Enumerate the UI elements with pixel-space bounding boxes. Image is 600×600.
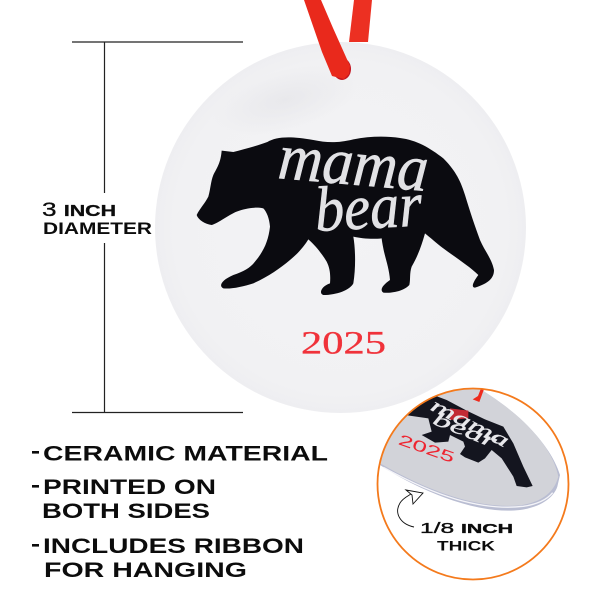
lettering: bear: bear <box>313 168 425 245</box>
bear silhouette with lettering <box>197 120 494 295</box>
inset lettering: mama: mama <box>427 394 513 452</box>
inset border <box>378 388 568 580</box>
inset ornament edge <box>380 391 560 511</box>
icon: curved arrow <box>398 490 423 527</box>
label: diameter: DIAMETER <box>43 220 152 238</box>
label: thick: THICK <box>437 538 495 554</box>
inset lettering: bear: bear <box>430 408 500 453</box>
feature: ceramic material: CERAMIC MATERIAL <box>43 442 328 466</box>
feature list <box>32 442 328 582</box>
year: 2025 <box>301 326 386 362</box>
feature: printed on both sides: BOTH SIDES <box>42 500 210 523</box>
ribbon: hole and front strand <box>304 0 351 80</box>
inset year: 2025 <box>396 432 457 467</box>
feature: printed on both sides <box>32 476 216 523</box>
feature: includes ribbon for hanging <box>32 535 304 582</box>
inset bear <box>405 395 533 487</box>
label: 3 inch: 3 INCH <box>42 200 116 221</box>
ornament disc <box>155 42 526 413</box>
lettering: mama: mama <box>276 120 431 206</box>
inset: edge thickness close-up <box>370 380 568 580</box>
feature: includes ribbon for hanging: FOR HANGING <box>44 559 247 582</box>
dimension bracket: 3 inch diameter <box>72 42 243 412</box>
inset ribbon <box>473 388 484 402</box>
feature: printed on both sides: PRINTED ON <box>43 476 216 499</box>
feature: includes ribbon for hanging: INCLUDES RIBBON <box>43 535 304 558</box>
label: 1/8 inch: 1/8 INCH <box>420 520 513 537</box>
ribbon: back strand <box>349 0 372 42</box>
